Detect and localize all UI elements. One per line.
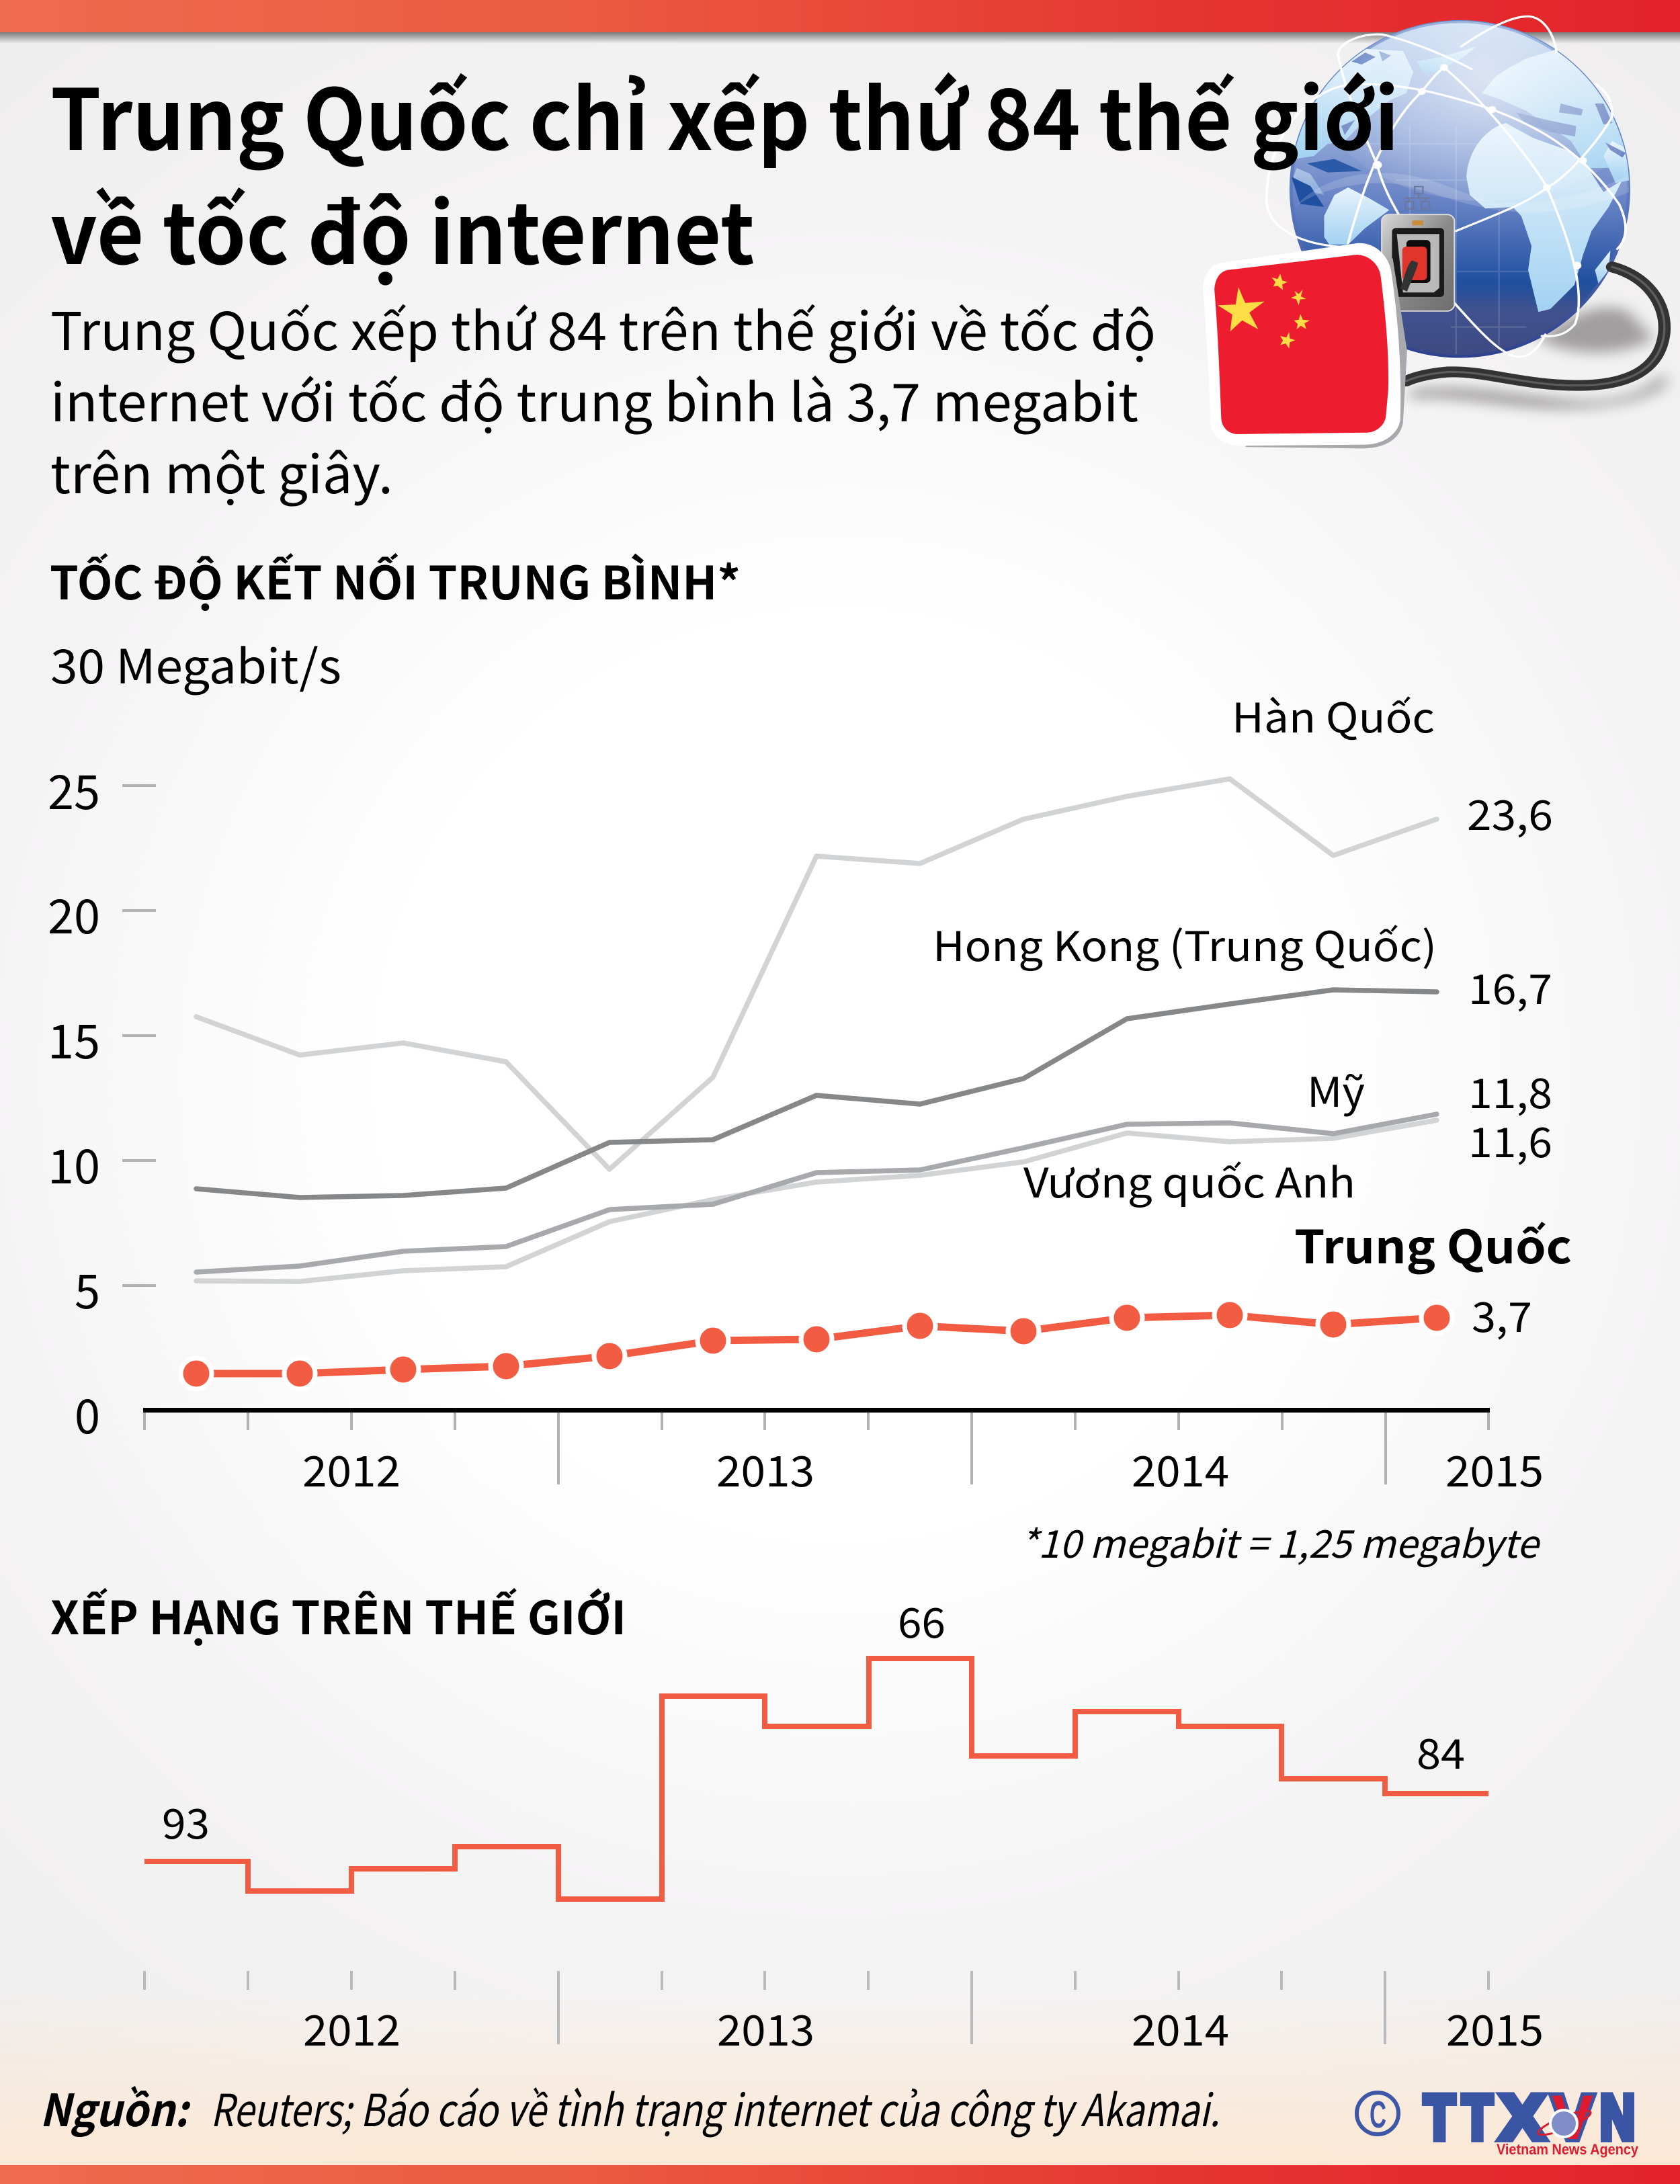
y axis labels and ticks: 15 [48,1005,100,1073]
y axis labels and ticks [48,755,156,1447]
logo wordmark: V [1552,2082,1593,2152]
logo wordmark: N [1600,2082,1635,2152]
heading: world ranking: XẾP HẠNG TRÊN THẾ GIỚI [50,1581,626,1648]
y axis labels and ticks: 5 [75,1255,100,1322]
series labels [933,685,1572,1344]
logo globe [1536,2107,1593,2139]
line: South Korea [196,779,1437,1169]
faint grid on the ocean [1355,126,1530,354]
bottom red bar [0,2165,1680,2184]
flag red field [1214,255,1388,434]
heading: average connection speed: TỐC ĐỘ KẾT NỐI TRUNG BÌNH* [50,546,741,613]
continents [1293,45,1633,312]
ranking value labels: 93 [162,1791,210,1851]
series labels: 11,6 [1468,1109,1552,1169]
ranking x axis years [303,1997,1544,2058]
ranking value labels [162,1590,1465,1851]
logo: TTXVN Vietnam News Agency [1357,2082,1639,2158]
series labels: Hàn Quốc [1232,685,1435,745]
ranking x axis years: 2015 [1446,1997,1544,2058]
ranking x axis years: 2014 [1132,1997,1229,2058]
line: China [181,1300,1452,1389]
title: về tốc độ internet [50,167,755,288]
series labels: 23,6 [1467,782,1553,842]
ranking x axis years: 2012 [303,1997,401,2058]
x axis ticks [144,1411,1488,1484]
seas [1292,51,1626,207]
icon: copyright [1357,2093,1398,2136]
logo tagline: Vietnam News Agency [1497,2141,1639,2158]
globe [1291,22,1628,356]
series labels: 16,7 [1468,956,1552,1016]
ranking value labels: 66 [898,1590,946,1650]
source line: Reuters; Báo cáo về tình trạng internet của công ty Akamai. [210,2075,1220,2140]
ranking step line [144,1658,1488,1899]
subtitle text: internet với tốc độ trung bình là 3,7 megabit [50,362,1138,437]
ranking x axis ticks [144,1971,1488,2044]
logo wordmark [1424,2082,1635,2152]
flag sticker [1203,243,1407,448]
source line: Nguồn: [40,2075,191,2140]
series labels: 3,7 [1472,1284,1532,1344]
y axis unit label: 30 Megabit/s [50,630,341,698]
line: United Kingdom [196,1120,1437,1282]
footnote: *10 megabit = 1,25 megabyte [1020,1514,1541,1569]
logo wordmark: X [1500,2082,1545,2152]
series labels: Trung Quốc [1294,1210,1572,1277]
series labels: Mỹ [1307,1059,1365,1119]
icon: copyright: C [1370,2093,1386,2136]
step chart: world ranking [144,1590,1544,2058]
series labels: Hong Kong (Trung Quốc) [933,913,1437,973]
title: Trung Quốc chỉ xếp thứ 84 thế giới [50,52,1399,174]
y axis labels and ticks: 25 [48,755,100,823]
logo wordmark: T [1462,2082,1493,2152]
y axis labels and ticks: 10 [48,1130,100,1198]
y axis labels and ticks: 20 [48,880,100,948]
logo wordmark: T [1424,2082,1455,2152]
network icon [1404,187,1431,209]
top red bar [0,0,1680,32]
footer band background [0,1989,1680,2165]
globe highlight [1341,21,1621,201]
x axis years: 2013 [716,1438,814,1499]
x axis years: 2012 [302,1438,401,1499]
network lines [1267,16,1626,357]
subtitle text: trên một giây. [50,433,393,509]
x axis years: 2014 [1132,1438,1229,1499]
flag stars [1218,274,1310,349]
subtitle text: Trung Quốc xếp thứ 84 trên thế giới về tốc độ [50,290,1156,366]
ranking value labels: 84 [1417,1721,1465,1781]
globe and cable shadow [1410,307,1667,409]
y axis labels and ticks: 0 [75,1380,100,1447]
socket [1382,214,1454,311]
line: Hong Kong [196,990,1437,1198]
top bar shadow [0,32,1680,44]
line chart: average connection speed [48,630,1572,1499]
power cable [1406,267,1665,386]
glossy band [1295,173,1629,212]
series labels: 11,8 [1468,1060,1552,1120]
x axis years: 2015 [1445,1438,1544,1499]
x axis [143,1408,1490,1413]
line: United States [196,1114,1437,1272]
illustration: globe plugged into Chinese flag [1203,0,1667,448]
title [50,52,1399,288]
ranking x axis years: 2013 [717,1997,814,2058]
series labels: Vương quốc Anh [1023,1150,1355,1210]
x axis years [302,1438,1544,1499]
subtitle text [50,290,1156,509]
